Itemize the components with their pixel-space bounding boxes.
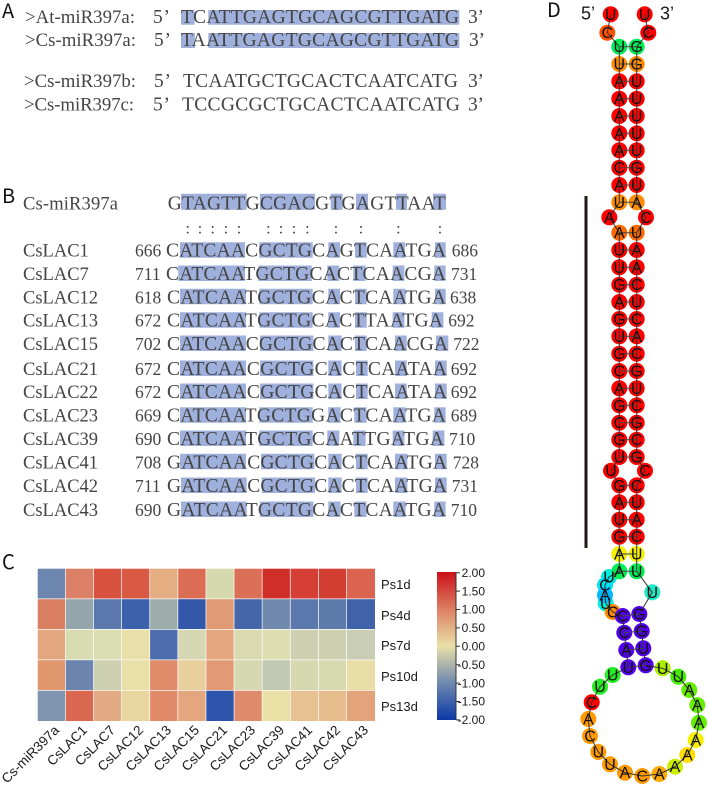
row: CsLAC41: 708 [135, 452, 162, 472]
row: Cs-miR397b: 5’ [154, 71, 171, 92]
5 prime end label: 5’ [581, 4, 595, 24]
base letters: U [631, 143, 642, 160]
row: CsLAC7: CATCAATGCTGCACTCAACGA [166, 264, 446, 285]
base letters: A [631, 260, 642, 277]
heatmap column labels: Cs-miR397a [0, 722, 62, 786]
heatmap column labels: CsLAC43 [320, 723, 371, 774]
base letters: A [614, 495, 625, 512]
base letters: A [614, 225, 625, 242]
heatmap column labels: CsLAC15 [151, 723, 202, 774]
row: CsLAC13: 692 [448, 311, 475, 331]
row: At-miR397a: 5’ [153, 7, 170, 28]
complementarity colons: : [396, 220, 401, 238]
base letters: U [605, 7, 616, 24]
row: Cs-miR397c: 3’ [468, 94, 484, 116]
base letters: A [614, 381, 625, 398]
base letters: U [614, 450, 625, 466]
base letters: A [631, 242, 642, 260]
row: CsLAC7 [23, 264, 477, 285]
RNA backbone line [588, 14, 699, 776]
base letters: A [604, 210, 615, 227]
base letters: A [690, 732, 701, 750]
row: CsLAC21: CATCAACGCTGCACTCAATAA [167, 359, 447, 380]
base letters: G [633, 606, 646, 624]
base letters: U [600, 596, 611, 613]
heatmap row labels: Ps7d [381, 638, 411, 653]
base letters: U [631, 495, 642, 512]
complementarity colons [185, 220, 442, 238]
base letters: A [631, 329, 642, 346]
base letters: C [614, 160, 625, 177]
row: CsLAC1: 686 [452, 241, 478, 261]
base letters: A [694, 715, 705, 732]
base letters: U [607, 668, 618, 684]
base letters: A [583, 712, 594, 728]
base letters: G [613, 478, 626, 495]
colour scale legend [437, 566, 485, 727]
base letters: U [631, 91, 642, 108]
row: Cs-miR397b: TCAATGCTGCACTCAATCATG [183, 71, 458, 92]
row: At-miR397a: 3’ [468, 7, 484, 28]
base letters: C [631, 432, 642, 449]
base letters: U [593, 744, 604, 762]
complementarity colons: : [359, 220, 363, 238]
complementarity colons: : [185, 220, 190, 238]
row: CsLAC12: 618 [135, 287, 162, 307]
row: CsLAC12: 638 [450, 287, 476, 307]
complementarity colons: : [292, 220, 296, 238]
3 prime end label: 3’ [660, 4, 674, 24]
base letters: A [621, 642, 632, 660]
heatmap column labels: CsLAC23 [207, 723, 258, 774]
row: Cs-miR397b: >Cs-miR397b: [24, 71, 136, 92]
base letters: U [603, 570, 615, 586]
row: CsLAC21: CsLAC21 [23, 360, 98, 380]
base letters: A [614, 294, 625, 312]
row: CsLAC1 [23, 241, 478, 262]
complementarity colons: : [279, 220, 283, 238]
colour scale legend: 0.00 [462, 640, 485, 654]
base letters: U [631, 564, 642, 581]
row: CsLAC15: 722 [453, 334, 480, 354]
row: CsLAC1: CsLAC1 [23, 242, 89, 262]
row: Cs-miR397a: TAATTGAGTGCAGCGTTGATG [181, 30, 459, 51]
base letters: G [630, 415, 643, 432]
row: CsLAC12: CATCAATGCTGCACTCAATGA [167, 287, 446, 308]
heatmap row labels: Ps13d [381, 699, 418, 714]
base letters: C [640, 210, 652, 227]
base letters: C [631, 529, 642, 546]
base letters: A [692, 698, 703, 714]
row: Cs-miR397c: TCCGCGCTGCACTCAATCATG [182, 94, 460, 116]
row: CsLAC39: CsLAC39 [23, 430, 98, 450]
complementarity colons: : [237, 220, 241, 238]
base letters: U [605, 463, 617, 480]
row: CsLAC15: CsLAC15 [23, 335, 98, 355]
complementarity colons: : [438, 220, 442, 238]
base letters: A [614, 126, 625, 143]
base letters: U [631, 294, 642, 312]
base letters: A [620, 765, 631, 782]
base letters: C [602, 25, 613, 42]
colour scale legend: -2.00 [458, 713, 485, 727]
row: CsLAC22 [23, 382, 477, 403]
base letters: C [584, 728, 596, 746]
row: CsLAC41 [23, 452, 479, 473]
complementarity colons: : [334, 220, 338, 238]
row: CsLAC42: 731 [452, 476, 478, 496]
row: CsLAC22: CsLAC22 [23, 383, 98, 403]
heatmap column labels: CsLAC7 [72, 723, 118, 769]
row: Cs-miR397c: >Cs-miR397c: [24, 94, 134, 116]
base letters: C [599, 578, 611, 594]
row: CsLAC21: 672 [135, 359, 161, 379]
row: CsLAC13: 672 [135, 311, 161, 331]
base letters: U [594, 679, 606, 696]
base letters: U [647, 585, 658, 602]
base letters: A [682, 748, 693, 764]
heatmap column labels: CsLAC21 [179, 723, 230, 774]
base letters: A [654, 766, 665, 784]
row: CsLAC39: 710 [449, 429, 476, 449]
base letters: U [614, 56, 625, 74]
colour scale legend: 2.00 [462, 566, 485, 580]
base letters: G [630, 39, 643, 56]
heatmap column labels: CsLAC12 [95, 723, 146, 774]
base letters: U [631, 381, 642, 398]
base letters: G [613, 432, 626, 449]
row: CsLAC13: CsLAC13 [23, 312, 98, 332]
base letters: C [631, 478, 642, 495]
row: Cs-miR397a [25, 30, 485, 51]
row: CsLAC21 [23, 359, 477, 380]
row: CsLAC41: 728 [453, 452, 479, 472]
row: Cs-miR397a query [23, 193, 446, 214]
row: Cs-miR397c: 5’ [153, 94, 170, 116]
row: CsLAC23: CsLAC23 [23, 407, 98, 427]
base letters: C [617, 608, 628, 626]
base letters: A [614, 91, 625, 108]
base letters: U [673, 669, 684, 686]
heatmap row labels: Ps10d [381, 669, 418, 684]
heatmap column labels: CsLAC39 [236, 723, 287, 774]
panel: D RNA secondary structure [547, 0, 707, 786]
base letters: U [631, 108, 642, 126]
row: CsLAC13: CATCAATGCTGCACTTAATGA [167, 311, 443, 332]
row: Cs-miR397c [24, 94, 484, 116]
panel label B: B [2, 180, 15, 209]
base letters: U [614, 260, 625, 277]
base letters: U [638, 641, 649, 658]
row: CsLAC42: 711 [135, 476, 161, 496]
base letters: C [619, 625, 630, 642]
base letters: C [639, 463, 651, 480]
row: CsLAC7: 731 [451, 264, 477, 284]
row: CsLAC21: 692 [451, 359, 477, 379]
row: CsLAC22: CATCAACGCTGCACTCAATAA [167, 382, 447, 403]
row: CsLAC7: CsLAC7 [23, 265, 89, 285]
row: CsLAC43: 710 [451, 500, 477, 520]
heatmap cells [38, 569, 375, 721]
complementarity colons: : [266, 220, 271, 238]
panel: B target alignment [2, 180, 480, 521]
row: CsLAC39 [23, 429, 476, 450]
base letters: C [614, 364, 625, 380]
base letters: C [631, 277, 642, 294]
base letters: C [586, 695, 597, 712]
base letters: C [631, 346, 642, 363]
row: CsLAC43: 690 [135, 500, 162, 520]
base letters [583, 7, 705, 786]
sequence highlights A [181, 10, 459, 48]
base letters: U [631, 225, 642, 242]
heatmap column labels: CsLAC13 [123, 723, 174, 774]
colour scale legend: 1.00 [462, 603, 485, 617]
row: CsLAC22: 672 [135, 382, 161, 402]
complementarity colons: : [210, 220, 215, 238]
row: Cs-miR397a query: GTAGTTGCGACGTGAGTTAAT [168, 193, 446, 214]
panel: A miRNA sequences [2, 0, 485, 116]
base letters: A [684, 682, 695, 700]
row: CsLAC41: CsLAC41 [23, 453, 98, 473]
heatmap column labels [0, 722, 371, 786]
row: CsLAC12 [23, 287, 476, 308]
base letters: A [600, 588, 611, 604]
row: CsLAC43: CsLAC43 [23, 501, 98, 521]
base letters: C [643, 25, 654, 42]
row: CsLAC23: 689 [451, 406, 477, 426]
base letters: A [631, 512, 642, 529]
base letters: A [614, 178, 625, 194]
base pair lines [619, 47, 646, 667]
row: CsLAC42: GATCAACGCTGCACTCAATGA [167, 476, 447, 497]
base letters: U [631, 546, 642, 564]
base letters: U [623, 660, 634, 677]
base letters: G [630, 160, 643, 177]
row: CsLAC7: 711 [135, 264, 161, 284]
heatmap column labels: CsLAC42 [292, 723, 343, 774]
row: CsLAC39: CATCAATGCTGCAATTGATGA [167, 429, 444, 450]
heatmap row labels: Ps1d [381, 577, 411, 592]
colour scale legend: -1.50 [458, 695, 485, 709]
base letters: G [630, 56, 643, 74]
complementarity colons: : [198, 220, 202, 238]
base letters: U [631, 126, 642, 143]
base letters: A [614, 546, 625, 564]
base letters: U [614, 195, 625, 212]
row: At-miR397a: >At-miR397a: [25, 7, 135, 28]
base letters: G [630, 364, 643, 380]
base letters: G [613, 346, 626, 363]
row: Cs-miR397a: 5’ [154, 30, 171, 51]
row: Cs-miR397b: 3’ [468, 71, 484, 92]
row: CsLAC1: 666 [135, 241, 162, 261]
heatmap column labels: CsLAC1 [44, 723, 90, 769]
row: CsLAC15 [23, 334, 480, 355]
colour scale legend: 1.50 [462, 584, 485, 598]
row: CsLAC15: 702 [135, 334, 161, 354]
base letters: C [614, 415, 625, 432]
heatmap column labels: CsLAC41 [264, 723, 315, 774]
complementarity colons: : [224, 220, 228, 238]
row: At-miR397a: TCATTGAGTGCAGCGTTGATG [181, 7, 459, 28]
base letters: A [614, 143, 625, 160]
base letters: U [657, 661, 668, 678]
base letters: G [613, 529, 626, 546]
row: CsLAC22: 692 [451, 382, 477, 402]
base letters: C [607, 604, 618, 622]
base letters: U [631, 178, 642, 194]
row: CsLAC23 [23, 406, 477, 427]
base letters: G [613, 277, 626, 294]
base letters: U [604, 757, 616, 774]
base letters: G [639, 658, 652, 675]
row: CsLAC43 [23, 500, 477, 521]
complementarity colons: : [305, 220, 310, 238]
base letters: G [613, 398, 626, 415]
base letters: C [637, 768, 648, 786]
base letters: A [614, 564, 625, 581]
base letters: C [631, 312, 642, 328]
base letters: U [631, 74, 642, 91]
row: CsLAC43: GATCAATGCTGCACTCAATGA [167, 500, 446, 521]
row: CsLAC39: 690 [135, 429, 162, 449]
colour scale legend: -1.00 [458, 676, 485, 690]
base letters: A [614, 108, 625, 126]
panel: C expression heatmap [0, 546, 485, 786]
row: Cs-miR397a: 3’ [469, 30, 485, 51]
row: Cs-miR397a: >Cs-miR397a: [25, 30, 136, 51]
nucleotide discs [580, 6, 707, 784]
mature miRNA region bar [584, 196, 588, 548]
row: Cs-miR397a query: Cs-miR397a [23, 194, 118, 214]
panel label C: C [2, 546, 15, 575]
colour scale legend: -0.50 [458, 658, 485, 672]
heatmap row labels [381, 577, 418, 714]
base letters: G [635, 624, 648, 640]
base letters: G [630, 450, 643, 466]
base letters: A [670, 759, 681, 776]
base letters: U [614, 512, 625, 529]
row: CsLAC12: CsLAC12 [23, 288, 98, 308]
row: CsLAC23: CATCAATGCTGGACTCAATGA [167, 406, 446, 427]
row: CsLAC1: CATCAACGCTGCAGTCAATGA [166, 241, 446, 262]
base letters: G [613, 312, 626, 328]
row: CsLAC23: 669 [135, 406, 162, 426]
row: CsLAC42 [23, 476, 478, 497]
base letters: A [614, 74, 625, 91]
colour scale legend: 0.50 [462, 621, 485, 635]
base letters: U [639, 7, 650, 24]
base letters: A [631, 195, 642, 212]
row: Cs-miR397b [24, 71, 484, 92]
heatmap row labels: Ps4d [381, 608, 411, 623]
base letters: U [614, 39, 625, 56]
row: CsLAC41: GATCAACGCTGCACTCAATGA [167, 452, 447, 473]
row: CsLAC42: CsLAC42 [23, 477, 98, 497]
row: CsLAC15: CATCAACGCTGCACTCAACGA [167, 334, 448, 355]
base letters: U [614, 329, 625, 346]
row: CsLAC13 [23, 311, 475, 332]
row: At-miR397a [25, 7, 484, 28]
base letters: U [614, 242, 625, 260]
base letters: C [631, 398, 642, 415]
